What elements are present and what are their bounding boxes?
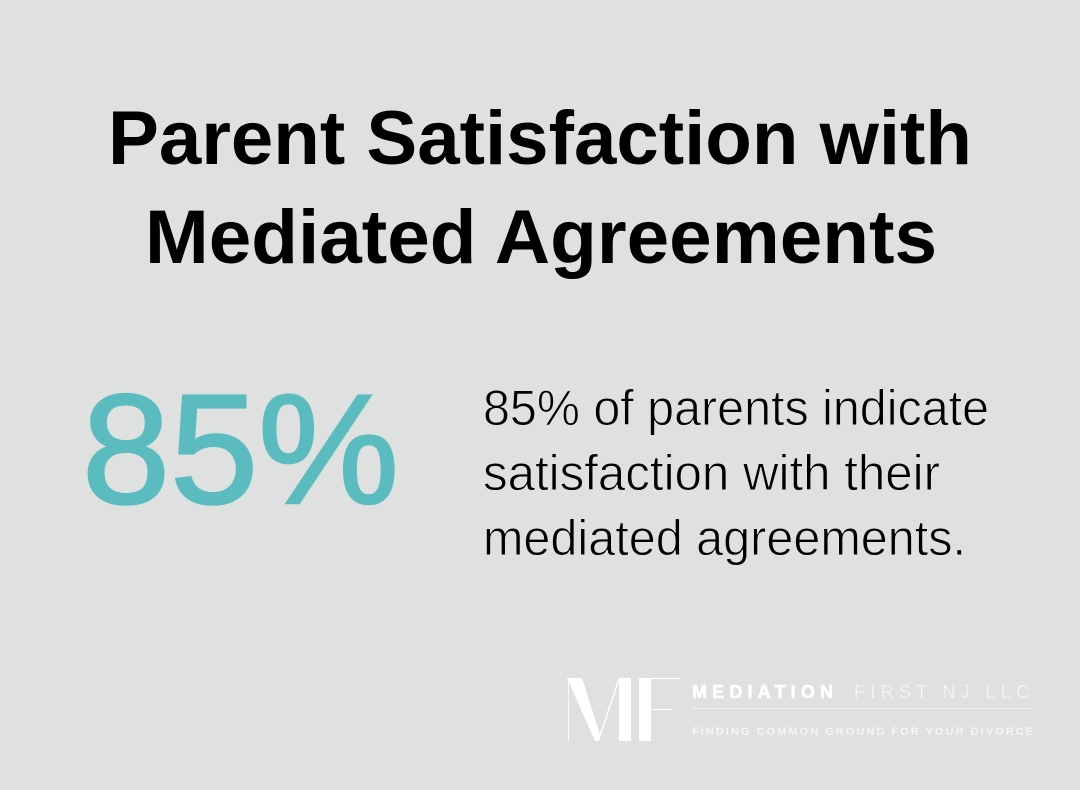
logo name: MEDIATION <box>692 682 833 702</box>
title <box>108 96 972 280</box>
title: Parent Satisfaction with <box>108 96 972 181</box>
description text: satisfaction with their <box>483 445 940 501</box>
description text: mediated agreements. <box>483 510 966 566</box>
logo divider <box>692 708 1032 709</box>
logo monogram MF <box>567 678 680 741</box>
logo: Mediation First NJ LLC <box>567 678 1033 741</box>
description text: 85% of parents indicate <box>483 380 989 436</box>
title: Mediated Agreements <box>145 195 937 280</box>
logo name: FIRST NJ LLC <box>854 682 1029 702</box>
description text <box>483 380 989 566</box>
big statistic: 85%: 85% <box>82 363 399 537</box>
logo tagline: FINDING COMMON GROUND FOR YOUR DIVORCE <box>692 726 1033 738</box>
logo name <box>692 682 1029 702</box>
